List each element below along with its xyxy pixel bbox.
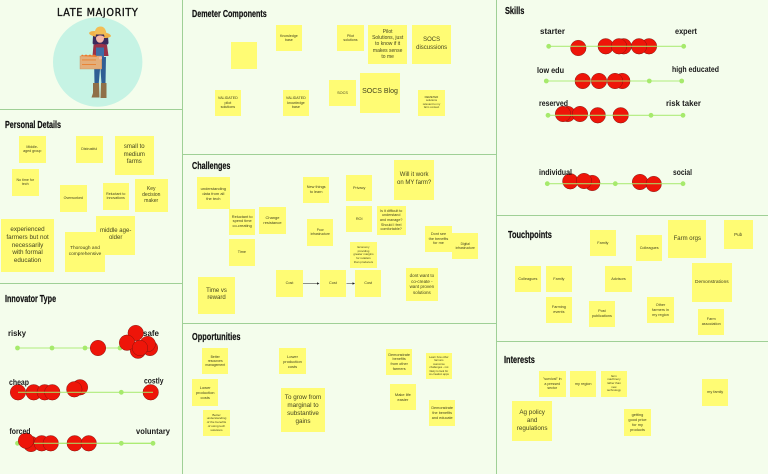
note: getting good price: getting: [632, 412, 643, 417]
note: lower production costs: [279, 348, 306, 374]
note: farming events: [546, 297, 572, 323]
note: demonstrate benefits from other farmers: farmers: [393, 367, 406, 371]
note: other farmers: Other: [656, 303, 665, 307]
note: demonstrate benefits from other farmers: [386, 349, 412, 375]
note: better understanding: [203, 410, 230, 436]
note: validated knowledge base: [283, 90, 309, 116]
chart: cheap to costly slider: cheap: [9, 377, 29, 387]
note: experienced farmers: education: [14, 257, 41, 264]
note: poor infrastructure: Poor: [317, 228, 324, 232]
note: reluctant to spend time: [229, 209, 255, 235]
note: economy: than producers: [354, 260, 373, 264]
note: socs: SOCS: [337, 91, 348, 95]
note: colleagues: [636, 235, 662, 261]
chart: forced to voluntary slider: forced: [10, 426, 30, 436]
note: roi: ROI: [356, 217, 363, 221]
chart: reserved to risk taker slider: reserved: [539, 98, 568, 108]
note: validated pilot solutions: VALIDATED: [218, 96, 238, 100]
note: farm orgs: Farm orgs: [674, 236, 701, 242]
chart: reserved to risk taker slider: risk taker: [666, 98, 702, 108]
note: farm machinery: [601, 371, 627, 397]
note: economy: greater margins: [353, 252, 374, 256]
note: poor infrastructure: infrastructure: [311, 232, 330, 236]
chart: low edu to high educated slider: low edu: [537, 65, 564, 75]
note: better resources management: [202, 348, 228, 374]
note: cost 1: [276, 270, 303, 297]
note: small to medium farms: farms: [127, 159, 142, 165]
note: experienced farmers: with formal: [12, 249, 43, 256]
note: privacy: [346, 175, 372, 201]
note: colleagues: Colleagues: [640, 246, 659, 250]
note: pilot solutions just to know: to me: [381, 54, 394, 60]
note: socs: [329, 80, 356, 106]
note: pilot solutions just to know: makes sense: [373, 48, 402, 54]
heading: innovator type: Innovator Type: [5, 294, 56, 305]
note: better understanding: of the benefits: [207, 420, 226, 424]
note: pilot solutions just to know: [368, 25, 407, 64]
note: key decision maker: [135, 179, 168, 212]
note: time: [229, 239, 255, 266]
note: experienced farmers: [1, 219, 54, 272]
note: change resistance: [259, 207, 286, 234]
note: small to medium farms: [115, 136, 154, 174]
note: middle-aged group: Middle-: [26, 145, 38, 149]
note: reluctant to innovations: Reluctant to: [106, 192, 125, 196]
note: middle age-older: middle age-: [100, 228, 131, 234]
note: farm machinery: machinery: [607, 377, 621, 381]
note: pilot solutions: Pilot: [347, 34, 354, 38]
note: survival: "survival" in: [543, 377, 562, 381]
note: demeter solutions: farm context: [424, 105, 439, 109]
note: understanding data: the tech: [206, 196, 220, 201]
note: validated knowledge base: VALIDATED: [286, 96, 306, 100]
note: lower production costs: Lower: [287, 354, 298, 359]
note: dont see the benefits: Dont see: [431, 232, 446, 236]
note: middle age-older: [96, 216, 135, 255]
note: to grow: substantive: [287, 410, 319, 417]
note: demonstrations: [692, 263, 732, 302]
note: demonstrate the benefits and educate: the benefits: [432, 411, 452, 415]
note: cost 1: Cost: [286, 281, 293, 285]
chart: individual to social slider: individual: [539, 167, 572, 177]
chart: risky to safe slider: risky: [8, 328, 26, 338]
note: better resources management: management: [205, 363, 225, 367]
note: thorough and comprehensive: comprehensive: [69, 252, 101, 257]
note: cost 3: Cost: [364, 281, 372, 285]
note: lower production costs 2: Lower: [200, 385, 211, 390]
note: socs discussions: [412, 25, 451, 64]
note: new things to learn: [303, 177, 329, 203]
note: better understanding: Better: [212, 413, 221, 417]
note: farm machinery: rather than: [607, 381, 621, 385]
note: demeter solutions: DEMETER: [425, 95, 438, 99]
note: dont want to co-create: solutions: [413, 290, 431, 295]
note: roi: [346, 206, 372, 232]
note: learn how other farmers: [426, 353, 452, 379]
note: make life easier: [390, 384, 416, 410]
note: advisors: Advisors: [611, 277, 626, 281]
note: colleagues 2: Colleagues: [518, 277, 537, 281]
note: validated knowledge base: knowledge: [287, 101, 305, 105]
note: advisors: [605, 266, 632, 292]
note: middle age-older: older: [109, 235, 122, 241]
note: demonstrate the benefits and educate: and educate: [432, 416, 453, 420]
chart: forced to voluntary slider: voluntary: [136, 426, 170, 436]
note: dont see the benefits: the benefits: [429, 237, 448, 241]
note: ag policy: [512, 401, 552, 441]
note: post publications: Post: [598, 309, 606, 313]
note: lower production costs 2: [192, 379, 218, 406]
note: reluctant to spend time: co-creating: [233, 223, 252, 228]
note: my family: my family: [707, 390, 723, 394]
note: reluctant to innovations: [102, 183, 129, 210]
note: no time for tech: No time for: [16, 178, 34, 182]
note: is it difficult: understand: [382, 213, 400, 217]
note: new things to learn: New things: [307, 185, 326, 189]
note: family 2: Family: [553, 277, 564, 281]
note: is it difficult: Should I feel: [381, 223, 401, 227]
note: lower production costs 2: production: [196, 390, 215, 395]
note: family: Family: [597, 241, 608, 245]
note: demonstrate benefits from other farmers: from other: [391, 362, 408, 366]
note: experienced farmers: experienced: [10, 226, 45, 233]
note: change resistance: resistance: [263, 220, 282, 225]
note: key decision maker: decision: [142, 192, 160, 198]
note: digital infrastructure: Digital: [461, 242, 470, 246]
note: no time for tech: tech: [22, 182, 29, 186]
heading: opportunities: Opportunities: [192, 332, 241, 343]
heading: interests: Interests: [504, 355, 535, 366]
chart: individual to social slider: social: [673, 167, 692, 177]
note: learn how other farmers: challenges - not: [429, 366, 448, 369]
note: ag policy: and: [527, 417, 537, 424]
note: getting good price: good price: [628, 417, 647, 422]
note: dont see the benefits: [425, 226, 452, 252]
note: pilot solutions just to know: Pilot: [383, 29, 393, 35]
chart: starter to expert slider: starter: [540, 26, 566, 36]
note: ag policy: regulations: [517, 425, 548, 432]
note: digital infrastructure: [452, 233, 478, 259]
note: learn how other farmers: likely to look for: [430, 370, 448, 373]
note: distrustful: Distrustful: [81, 147, 97, 151]
note: to grow: To grow from: [285, 394, 321, 401]
note: socs blog: SOCS Blog: [362, 88, 398, 95]
note: lower production costs: production: [283, 359, 302, 364]
note: farm association: [698, 309, 724, 335]
note: other farmers: farmers in: [652, 308, 669, 312]
note: key decision maker: maker: [144, 198, 158, 204]
heading: skills: Skills: [505, 6, 524, 17]
note: demeter solutions: [418, 90, 445, 116]
note: family: [590, 230, 616, 256]
note: will it work: Will it work: [400, 172, 428, 178]
note: economy: for retailers: [356, 256, 371, 260]
note: family 2: [546, 266, 572, 292]
note: privacy: Privacy: [353, 186, 365, 190]
note: demeter solutions: relevant to my: [423, 102, 440, 106]
title: LATE MAJORITY: [57, 6, 138, 19]
note: knowledge base: base: [285, 38, 293, 42]
note: time vs reward: Time vs: [206, 288, 227, 294]
note: experienced farmers: necessarily: [12, 242, 43, 249]
note: time vs reward: reward: [207, 295, 226, 301]
note: farm orgs: [668, 220, 706, 258]
note: learn how other farmers: Learn how other: [429, 356, 449, 359]
note: getting good price: products: [630, 427, 645, 432]
note: empty: [231, 42, 257, 68]
note: learn how other farmers: overcome: [433, 363, 445, 366]
note: better resources management: Better: [211, 355, 220, 359]
note: cost 2: [320, 270, 346, 297]
note: demonstrate benefits from other farmers: Demonstrate: [388, 353, 410, 357]
note: lower production costs: costs: [288, 364, 297, 369]
note: demonstrate the benefits and educate: Demonstrate: [431, 406, 453, 410]
note: to grow: [281, 388, 325, 432]
note: farm machinery: new: [611, 385, 617, 389]
heading: touchpoints: Touchpoints: [508, 230, 552, 241]
note: small to medium farms: medium: [124, 152, 145, 158]
note: economy: [350, 242, 377, 268]
note: dont see the benefits: for me: [433, 241, 444, 245]
note: learn how other farmers: farmers: [434, 359, 443, 362]
note: reluctant to spend time: spend time: [233, 218, 252, 223]
note: pilot solutions just to know: to know if it: [375, 41, 400, 47]
note: pub: [724, 220, 753, 249]
note: validated pilot solutions: solutions: [221, 105, 235, 109]
note: new things to learn: to learn: [310, 190, 323, 194]
note: time vs reward: [198, 277, 235, 314]
note: post publications: [589, 301, 615, 327]
note: demonstrate the benefits and educate: [429, 400, 455, 426]
note: is it difficult: Is it difficult to: [380, 209, 402, 213]
note: dont want to co-create: dont want to: [410, 273, 434, 278]
note: dont want to co-create: want proven: [410, 284, 434, 289]
note: distrustful: [76, 136, 102, 162]
note: dont want to co-create: [406, 268, 438, 301]
note: farm machinery: technology: [607, 388, 621, 392]
note: key decision maker: Key: [147, 186, 156, 192]
chart: starter to expert slider: expert: [675, 26, 697, 36]
note: better understanding: understanding: [207, 416, 226, 420]
note: demeter solutions: solutions: [426, 98, 437, 102]
note: dont want to co-create: co-create -: [411, 279, 433, 284]
note: other farmers: [647, 297, 674, 323]
note: is it difficult: comfortable?: [381, 227, 402, 231]
note: middle-aged group: aged group: [23, 149, 41, 153]
note: validated knowledge base: base: [292, 105, 300, 109]
note: colleagues 2: [515, 266, 541, 292]
chart: risky to safe slider: safe: [143, 328, 159, 338]
note: better understanding: of using tech: [208, 424, 225, 428]
note: is it difficult: [377, 206, 406, 235]
note: make life easier: easier: [397, 397, 408, 402]
note: socs discussions: discussions: [416, 44, 447, 50]
note: knowledge base: Knowledge: [280, 34, 298, 38]
note: is it difficult: and manage?: [380, 218, 402, 222]
note: overworked: Overworked: [64, 196, 83, 200]
note: economy: Economy: [357, 245, 370, 249]
note: better understanding: solutions: [210, 428, 223, 432]
note: survival: sector: [547, 386, 557, 390]
note: reluctant to innovations: innovations: [107, 196, 125, 200]
note: getting good price: [624, 409, 651, 436]
heading: challenges: Challenges: [192, 161, 230, 172]
note: pilot solutions just to know: Solutions, just: [372, 35, 403, 41]
note: understanding data: [197, 177, 230, 209]
note: to grow: marginal to: [287, 402, 319, 409]
note: change resistance: Change: [265, 215, 280, 220]
note: validated pilot solutions: [215, 90, 241, 116]
note: survival: a pressed: [544, 382, 560, 386]
note: lower production costs 2: costs: [201, 395, 210, 400]
note: farming events: events: [553, 310, 564, 314]
note: socs discussions: SOCS: [423, 37, 440, 43]
note: time: Time: [238, 250, 246, 254]
note: cost 2: Cost: [329, 281, 337, 285]
note: farming events: Farming: [552, 305, 566, 309]
note: reluctant to spend time: Reluctant to: [232, 214, 253, 219]
note: experienced farmers: farmers but not: [6, 234, 49, 241]
note: my family: [702, 379, 728, 406]
heading: demeter components: Demeter Components: [192, 9, 267, 20]
note: pub: Pub: [734, 232, 742, 237]
note: demonstrate benefits from other farmers: benefits: [393, 357, 406, 361]
note: getting good price: for my: [632, 422, 643, 427]
note: learn how other farmers: co-creation apps: [429, 373, 449, 376]
note: overworked: [60, 185, 86, 212]
chart: low edu to high educated slider: high educated: [672, 64, 719, 74]
note: farm association: Farm: [707, 317, 716, 321]
chart: cheap to costly slider: costly: [144, 376, 164, 386]
note: make life easier: Make life: [395, 392, 411, 397]
note: ag policy: Ag policy: [519, 409, 545, 416]
note: to grow: gains: [295, 418, 311, 425]
note: socs blog: [360, 73, 400, 113]
note: farm machinery: farm: [611, 374, 617, 378]
note: survival: [539, 371, 566, 397]
note: digital infrastructure: infrastructure: [456, 246, 475, 250]
note: other farmers: my region: [652, 313, 669, 317]
note: post publications: publications: [592, 314, 612, 318]
note: economy: providing: [358, 249, 369, 253]
note: small to medium farms: small to: [124, 144, 145, 150]
heading: personal details: Personal Details: [5, 120, 61, 131]
note: better resources management: resources: [208, 359, 223, 363]
note: understanding data: data from all: [202, 191, 224, 196]
note: poor infrastructure: [307, 219, 333, 246]
note: understanding data: understanding: [201, 186, 226, 191]
note: thorough and comprehensive: [65, 232, 105, 272]
note: my region: [570, 371, 596, 397]
note: will it work: on MY farm?: [397, 180, 431, 186]
note: farm association: association: [702, 322, 721, 326]
note: will it work: [394, 160, 434, 200]
note: cost 3: [355, 270, 381, 297]
note: knowledge base: [276, 25, 302, 51]
note: pilot solutions: [337, 25, 364, 51]
note: thorough and comprehensive: Thorough and: [70, 246, 100, 251]
note: pilot solutions: solutions: [343, 38, 358, 42]
note: middle-aged group: [19, 136, 46, 162]
note: validated pilot solutions: pilot: [224, 101, 231, 105]
note: my region: my region: [575, 382, 592, 386]
note: demonstrations: Demonstrations: [695, 280, 729, 285]
note: no time for tech: [12, 169, 38, 196]
